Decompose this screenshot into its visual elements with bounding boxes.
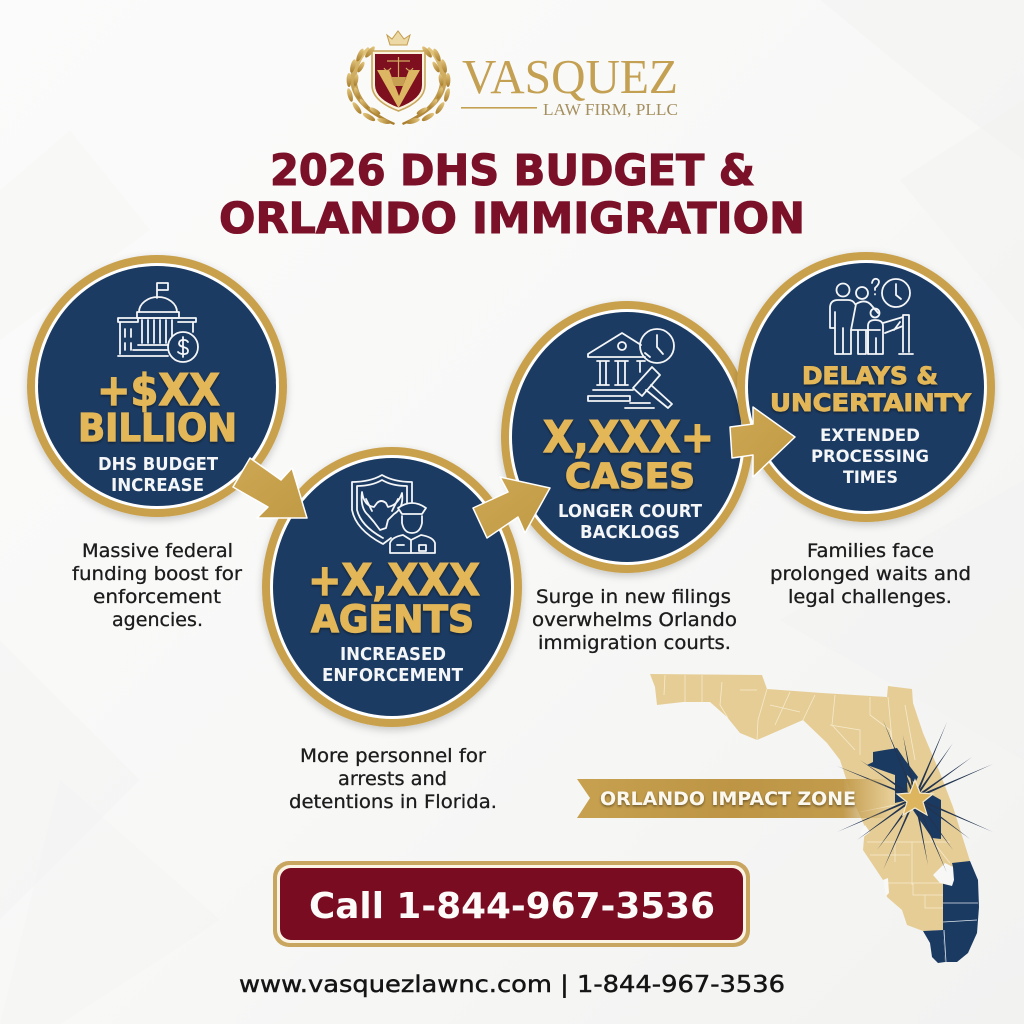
stat: +$XX billion: [78, 365, 237, 450]
stat: +$XX billion: +$XX: [97, 365, 220, 416]
call to action button: [273, 861, 750, 947]
county lines: [664, 675, 950, 908]
stat label: BACKLOGS: [580, 523, 680, 543]
stat label: DHS BUDGET: [98, 455, 218, 475]
arrow: agents to cases: [473, 477, 550, 538]
circle badge: [262, 447, 522, 727]
stat label: EXTENDED: [820, 426, 920, 446]
logo: Vasquez Law Firm: [346, 31, 678, 125]
panel: DHS budget: [27, 255, 287, 517]
Orlando area counties: [867, 748, 979, 963]
stat: delays and uncertainty: UNCERTAINTY: [770, 389, 972, 417]
stat label: ENFORCEMENT: [322, 666, 463, 686]
caption: delays: Families face: [807, 540, 934, 562]
Orlando star: [897, 780, 933, 815]
footer contact line: www.vasquezlawnc.com | 1-844-967-3536: [239, 972, 785, 998]
stat: +X,XXX agents: +X,XXX: [308, 555, 480, 606]
caption: budget: agencies.: [112, 609, 203, 631]
caption: cases: immigration courts.: [538, 632, 731, 654]
icon: courthouse clock and gavel: [588, 329, 674, 408]
title: 2026 DHS BUDGET &: [270, 146, 755, 196]
caption: cases: Surge in new filings: [536, 586, 731, 608]
arrow: budget to agents: [233, 458, 307, 518]
stat label: INCREASE: [111, 476, 204, 496]
logo wordmark: VASQUEZ: [462, 49, 678, 104]
caption: cases: overwhelms Orlando: [532, 609, 737, 631]
stat label: [811, 426, 929, 488]
icon: shield eagle and officer: [352, 475, 435, 553]
stat: X,XXX+ cases: CASES: [565, 457, 695, 497]
caption: delays: legal challenges.: [788, 586, 952, 608]
caption: delays: [770, 540, 971, 608]
stat: X,XXX+ cases: X,XXX+: [543, 412, 714, 463]
stat: X,XXX+ cases: [543, 412, 714, 497]
logo tagline: LAW FIRM, PLLC: [543, 100, 678, 119]
caption: delays: prolonged waits and: [770, 563, 971, 585]
stat label: TIMES: [843, 468, 898, 488]
title: [219, 146, 805, 244]
circle badge: [737, 252, 995, 522]
Orange county gold inset: [907, 783, 915, 797]
stat label: [98, 455, 218, 496]
Lake Okeechobee: [933, 863, 954, 886]
impact rays: [837, 720, 993, 873]
icon: family clock and barrier: [830, 279, 913, 354]
caption: budget: funding boost for: [72, 563, 242, 585]
panel: cases: [501, 301, 753, 573]
stat label: INCREASED: [340, 645, 446, 665]
caption: agents: arrests and: [338, 768, 447, 790]
icon: laurel wreath: [346, 45, 451, 125]
stat: +X,XXX agents: [308, 555, 480, 641]
caption: budget: enforcement: [93, 586, 221, 608]
stat label: [558, 502, 702, 543]
caption: agents: [289, 745, 497, 813]
call to action button: Call 1-844-967-3536: [309, 886, 715, 927]
title: ORLANDO IMMIGRATION: [219, 194, 805, 244]
Florida map: [650, 674, 993, 963]
Tampa Bay and Charlotte Harbor: [860, 825, 889, 896]
arrow: cases to delays: [730, 407, 795, 477]
caption: agents: detentions in Florida.: [289, 791, 497, 813]
banner: Orlando impact zone: ORLANDO IMPACT ZONE: [600, 789, 856, 810]
state outline: [650, 674, 970, 931]
icon: capitol and dollar coin: [118, 283, 198, 362]
caption: budget: Massive federal: [82, 540, 233, 562]
banner: Orlando impact zone: [577, 779, 890, 818]
south county lines: [943, 903, 978, 962]
stat label: [322, 645, 463, 686]
stat label: PROCESSING: [811, 447, 929, 467]
icon: crown: [387, 31, 410, 45]
stat: +$XX billion: BILLION: [78, 406, 237, 450]
panel: delays: [737, 252, 995, 522]
stat: delays and uncertainty: DELAYS &: [802, 362, 938, 390]
stat: delays and uncertainty: [770, 362, 972, 417]
caption: agents: More personnel for: [300, 745, 486, 767]
stat: +X,XXX agents: AGENTS: [311, 598, 474, 641]
caption: budget: [72, 540, 242, 631]
panel: agents: [262, 447, 522, 727]
circle badge: [501, 301, 753, 573]
stat label: LONGER COURT: [558, 502, 702, 522]
circle badge: [27, 255, 287, 517]
caption: cases: [532, 586, 737, 654]
icon: shield: [372, 51, 425, 111]
